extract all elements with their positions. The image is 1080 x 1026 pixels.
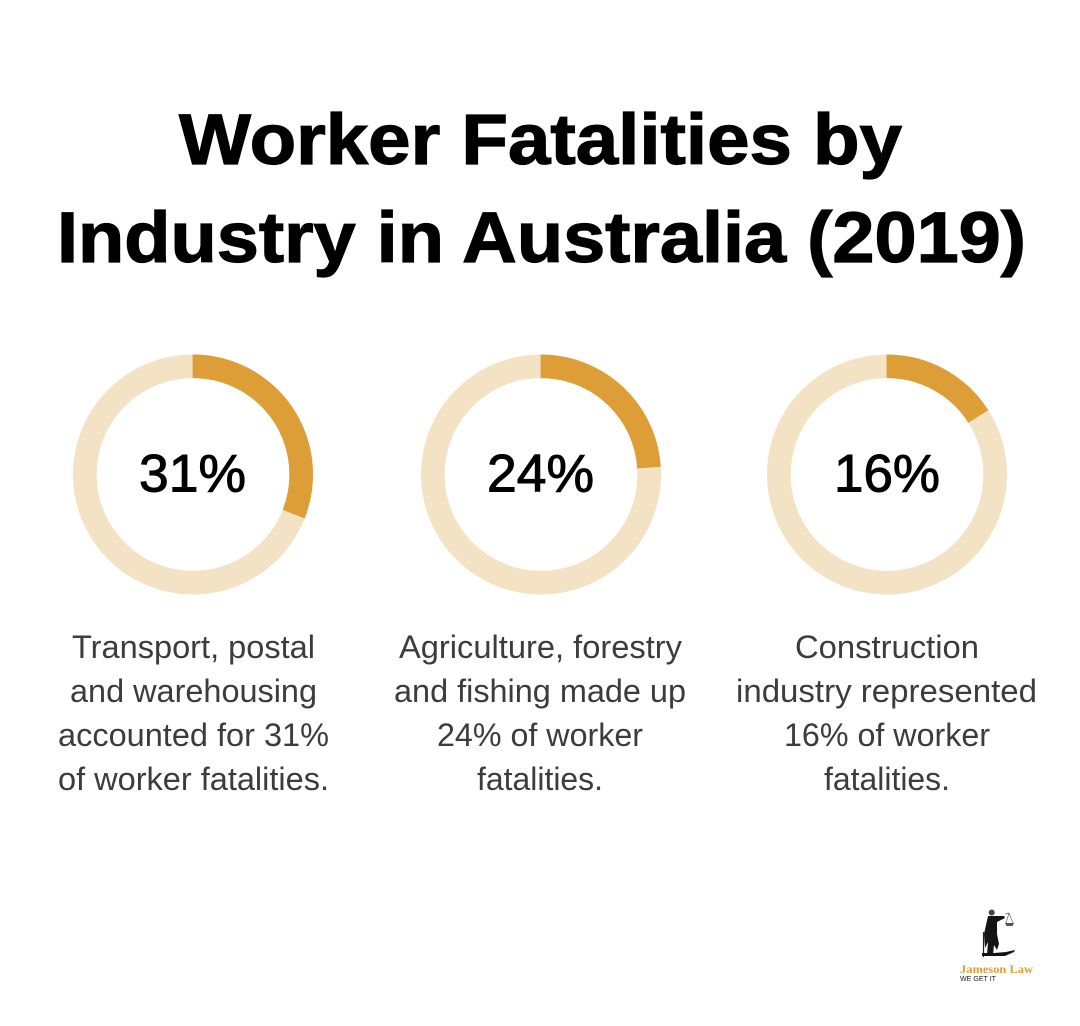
- icon: lady justice: [982, 910, 1015, 957]
- donut chart: 16%: [779, 366, 995, 583]
- text: transport description: of worker fatalities.: [58, 761, 329, 797]
- title: Industry in Australia (2019): [57, 199, 1026, 278]
- text: agriculture description: and fishing made up: [394, 673, 686, 709]
- donut chart: 31%: 31%: [139, 444, 246, 504]
- logo: Jameson Law: WE GET IT: [960, 974, 996, 983]
- text: construction description: fatalities.: [824, 761, 950, 797]
- donut chart: 24%: [433, 366, 649, 583]
- text: construction description: [736, 629, 1037, 797]
- donut chart: 24%: 24%: [487, 444, 594, 504]
- title: [57, 101, 1026, 278]
- logo: Jameson Law: Jameson Law: [960, 964, 1034, 976]
- panel: construction: [736, 366, 1037, 797]
- text: agriculture description: 24% of worker: [437, 717, 643, 753]
- text: transport description: and warehousing: [70, 673, 317, 709]
- text: transport description: accounted for 31%: [58, 717, 329, 753]
- text: transport description: Transport, postal: [72, 629, 315, 665]
- logo: Jameson Law: [960, 910, 1034, 983]
- donut chart: 31%: [85, 366, 301, 583]
- donut chart: 16%: 16%: [834, 444, 940, 504]
- title: Worker Fatalities by: [179, 101, 903, 180]
- text: construction description: industry represented: [736, 673, 1037, 709]
- text: construction description: 16% of worker: [784, 717, 990, 753]
- text: transport description: [58, 629, 329, 797]
- text: construction description: Construction: [795, 629, 979, 665]
- text: agriculture description: Agriculture, forestry: [399, 629, 682, 665]
- panel: transport: [58, 366, 329, 797]
- panel: agriculture: [394, 366, 686, 797]
- text: agriculture description: [394, 629, 686, 797]
- text: agriculture description: fatalities.: [477, 761, 603, 797]
